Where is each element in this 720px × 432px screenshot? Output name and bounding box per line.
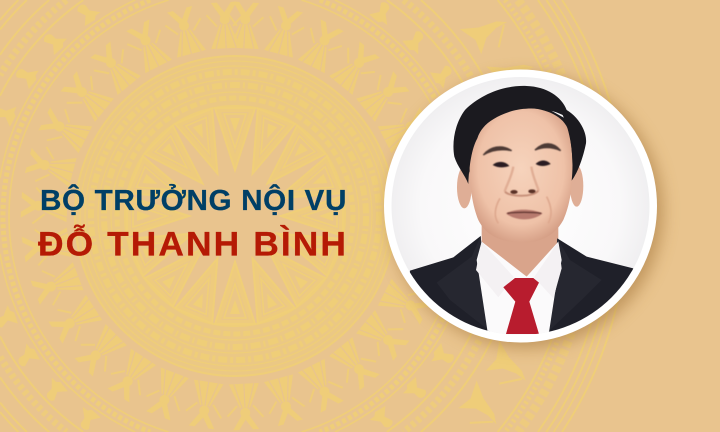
- facial details: [483, 144, 561, 223]
- mouth: [506, 210, 543, 219]
- necktie: [503, 278, 539, 334]
- face: [470, 108, 573, 243]
- inner disc band: [75, 56, 395, 376]
- feathered figure ring: [20, 1, 434, 431]
- nose shading: [505, 167, 539, 192]
- jacket: [410, 236, 490, 332]
- hair: [453, 86, 586, 184]
- portrait shadow: [389, 74, 663, 348]
- nose: [505, 191, 538, 196]
- portrait photo: [391, 77, 650, 360]
- shirt: [477, 242, 562, 337]
- heron ring: [454, 4, 541, 432]
- title: [38, 183, 348, 264]
- neck: [482, 226, 558, 276]
- title line: role: BỘ TRƯỞNG NỘI VỤ: [40, 183, 347, 217]
- central star rays: [127, 108, 343, 324]
- small bird ring: [0, 0, 478, 432]
- ears: [457, 166, 472, 208]
- title line: name: ĐỖ THANH BÌNH: [38, 226, 348, 264]
- smile folds: [495, 197, 551, 223]
- eyebrows: [483, 144, 561, 155]
- back of hair: [469, 108, 572, 174]
- portrait frame: [384, 70, 657, 342]
- eyes: [493, 160, 551, 167]
